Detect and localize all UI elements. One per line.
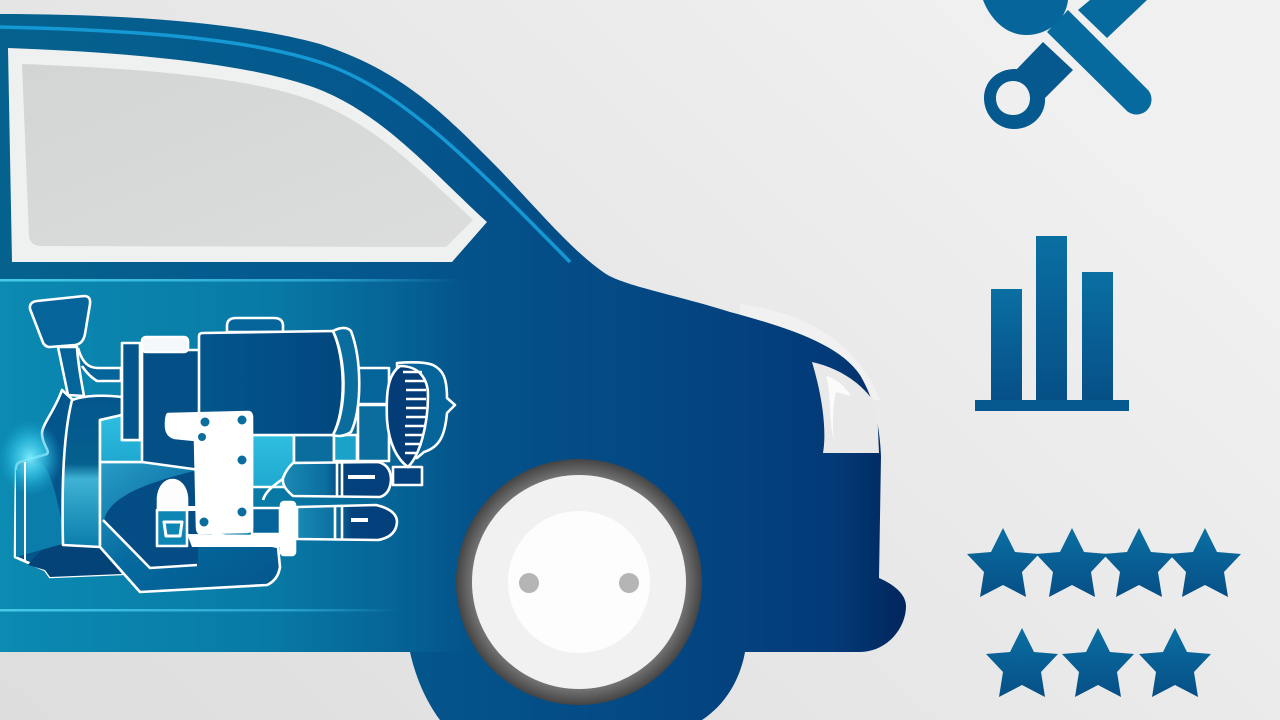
pulley bracket <box>393 467 422 485</box>
white base plate <box>166 412 252 533</box>
door lower line <box>0 609 400 612</box>
lever stem <box>58 347 84 396</box>
pulley <box>387 362 455 485</box>
light panels <box>252 435 294 487</box>
window glass <box>22 64 473 247</box>
inner sump line <box>103 520 197 568</box>
left housing outer <box>15 390 122 577</box>
rear shaft <box>358 368 389 404</box>
screwdriver tip <box>1078 0 1147 38</box>
air filter tab <box>227 318 283 332</box>
blue bar behind pipe <box>252 508 280 534</box>
connecting curve <box>263 478 284 500</box>
vertical white bracket <box>281 502 295 555</box>
wrench handle <box>984 42 1073 129</box>
tall block <box>122 343 140 440</box>
car <box>0 14 906 720</box>
engine illustration <box>0 296 455 592</box>
left housing lower dark <box>28 545 122 577</box>
wrench head <box>983 0 1068 35</box>
upper roller <box>283 462 391 497</box>
cylinder end cap <box>333 328 359 436</box>
lower sump <box>100 462 280 592</box>
roof light stripe <box>0 27 570 262</box>
left housing edge line <box>24 462 26 560</box>
star rating <box>967 528 1241 697</box>
window <box>8 48 487 262</box>
light panel <box>100 415 143 462</box>
main cylinder <box>199 331 343 435</box>
door lighter panel <box>0 281 470 652</box>
icon: bar chart <box>975 236 1129 411</box>
horizontal white pipe <box>187 534 282 547</box>
sump dark lobe <box>104 470 198 568</box>
plate bolts <box>198 416 246 526</box>
lever handle <box>30 296 90 347</box>
door upper line <box>0 279 460 282</box>
screwdriver shaft <box>1047 10 1152 115</box>
wheel <box>456 459 702 705</box>
headlight <box>812 362 879 453</box>
left housing highlight <box>16 462 66 557</box>
car body <box>0 14 906 720</box>
top cap <box>142 337 188 352</box>
lower roller <box>297 505 397 540</box>
window frame <box>8 48 487 262</box>
hood highlight <box>740 304 880 400</box>
icon: crossed wrench and screwdriver <box>983 0 1152 129</box>
inner band <box>63 396 122 547</box>
engine glow <box>0 420 62 496</box>
oil cap <box>158 480 187 512</box>
